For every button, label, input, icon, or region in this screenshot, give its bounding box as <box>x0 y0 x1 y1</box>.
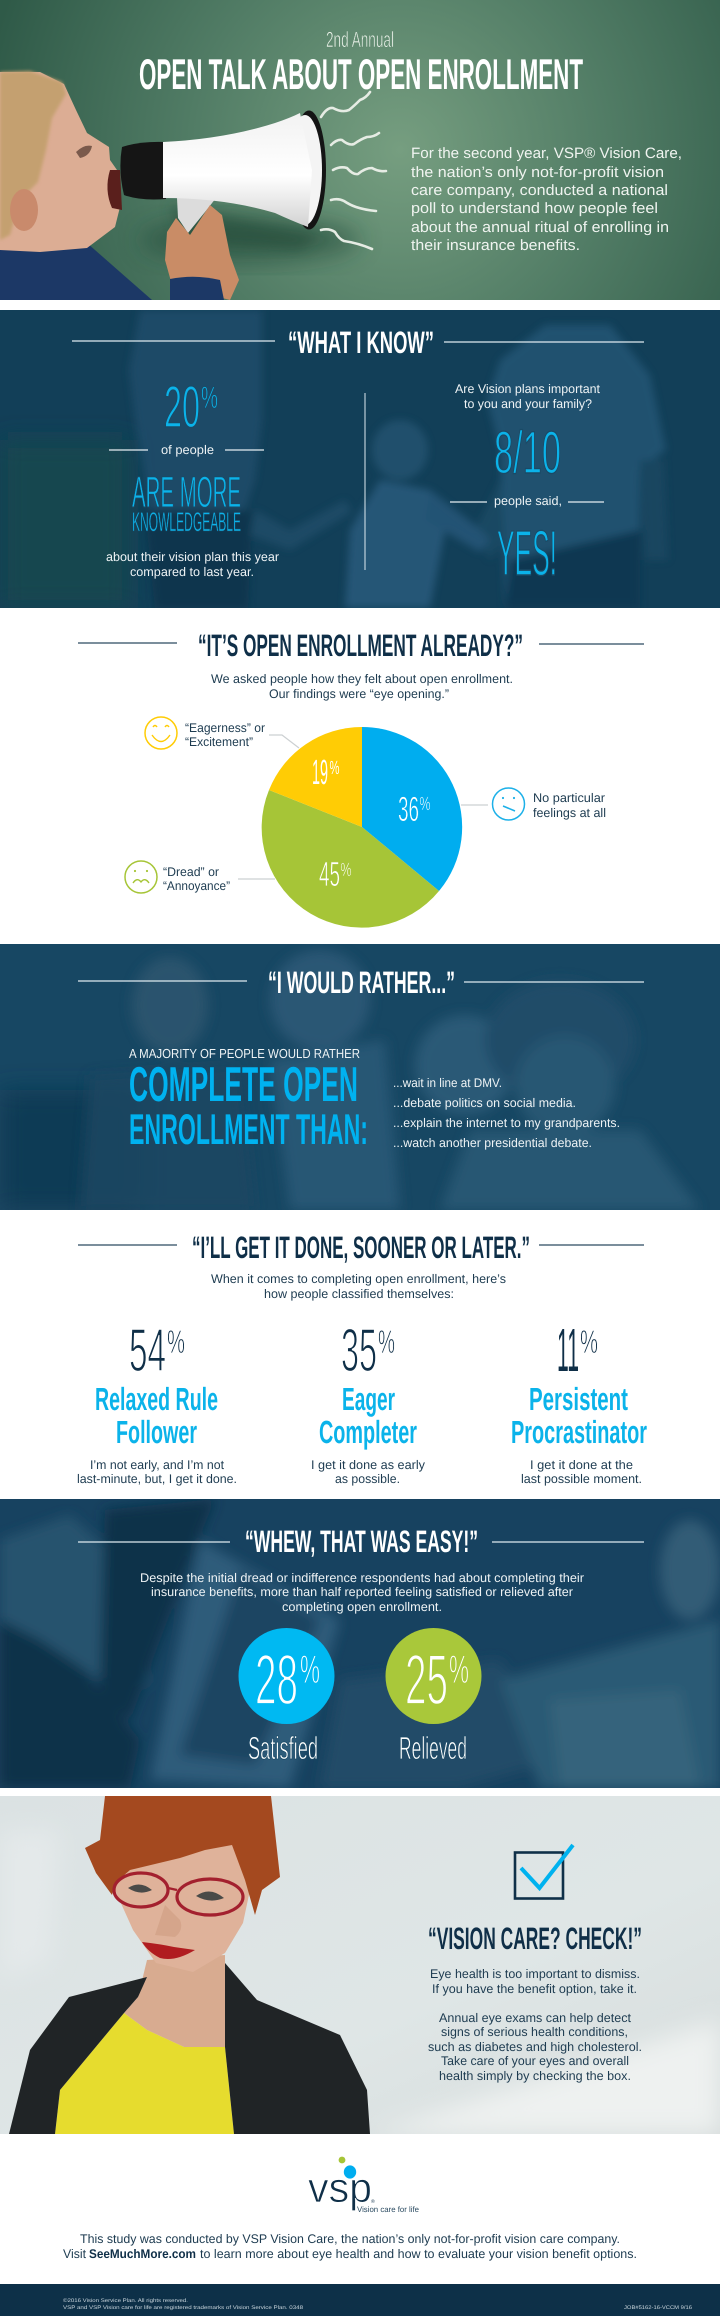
photo: woman with glasses <box>0 1796 720 2134</box>
stat: relaxed rule follower: 54 <box>129 1316 166 1384</box>
pie chart: 45 <box>319 855 340 894</box>
icon: blazer left <box>9 1977 147 2134</box>
panel: hero <box>0 0 720 300</box>
icon: megaphone shadow <box>170 205 320 250</box>
closing statement: Visit <box>63 2247 87 2261</box>
stat: 25% relieved <box>386 1628 482 1766</box>
stat: persistent procrastinator: % <box>580 1323 598 1360</box>
stat: 28% satisfied: Satisfied <box>248 1730 318 1766</box>
icon: boy's ear <box>10 189 38 231</box>
footer bar: JOB#5162-16-VCCM 9/16 <box>624 2305 692 2311</box>
headline <box>129 1046 368 1154</box>
stat: persistent procrastinator: last possible moment. <box>521 1472 642 1486</box>
heading: “I WOULD RATHER...” <box>268 965 455 1000</box>
stat: 8 of 10 said yes <box>450 382 604 589</box>
icon: boy's sweater <box>0 243 152 300</box>
background photo: bored people in line <box>0 944 720 1210</box>
stat: 20% more knowledgeable: about their vision plan this year <box>106 550 279 564</box>
icon: neck and chest <box>124 1955 225 2047</box>
body text: Eye health is too important to dismiss. <box>430 1967 640 1981</box>
stat: 20% more knowledgeable: ARE MORE <box>132 468 241 517</box>
pie chart: 36 <box>398 790 419 829</box>
body text: If you have the benefit option, take it. <box>432 1982 637 1996</box>
intro text: We asked people how they felt about open enrollment. <box>211 672 513 686</box>
body text: Annual eye exams can help detect <box>439 2011 632 2025</box>
stat: 28% satisfied: % <box>300 1648 320 1692</box>
stat: 20% more knowledgeable: % <box>201 380 218 415</box>
stat: 8 of 10 said yes: to you and your family? <box>464 397 592 411</box>
icon: nose shadow <box>155 1905 181 1937</box>
stat: persistent procrastinator: 11 <box>557 1316 579 1384</box>
stat: persistent procrastinator: Persistent <box>529 1381 628 1417</box>
stat: 20% more knowledgeable: of people <box>161 443 214 457</box>
hero intro text: their insurance benefits. <box>411 237 580 254</box>
headline: ENROLLMENT THAN: <box>129 1106 368 1154</box>
stat: 28% satisfied: 28 <box>255 1641 298 1720</box>
stat: eager completer: Completer <box>319 1414 417 1450</box>
stat: 8 of 10 said yes: people said, <box>494 494 562 508</box>
closing statement: to learn more about eye health and how to evaluate your vision benefit options. <box>200 2247 637 2261</box>
icon: face <box>115 1835 250 1972</box>
icon: checked box <box>515 1845 573 1898</box>
callout: dread or annoyance: “Dread” or <box>163 865 219 879</box>
icon: chalk sound waves <box>321 92 386 249</box>
intro text <box>211 1272 506 1301</box>
icon: boy's hair <box>0 71 66 240</box>
closing statement <box>63 2232 637 2261</box>
body text: health simply by checking the box. <box>439 2069 631 2083</box>
list of alternatives: ...watch another presidential debate. <box>393 1136 592 1150</box>
closing statement: This study was conducted by VSP Vision Care, the nation’s only not-for-profit vision care company. <box>80 2232 620 2246</box>
stat: persistent procrastinator: I get it done at the <box>530 1458 633 1472</box>
intro text: Despite the initial dread or indifference respondents had about completing their <box>140 1571 584 1585</box>
pie chart <box>262 727 462 928</box>
stat: 20% more knowledgeable: KNOWLEDGEABLE <box>132 507 241 537</box>
stat: 8 of 10 said yes: 8/10 <box>494 419 561 486</box>
icon: boy's hand <box>165 205 239 300</box>
hero intro text <box>411 145 682 254</box>
intro text: Our findings were “eye opening.” <box>269 687 449 701</box>
panel: I'll get it done <box>0 1210 720 1499</box>
stat: eager completer: as possible. <box>335 1472 400 1486</box>
body text: Take care of your eyes and overall <box>441 2054 629 2068</box>
list of alternatives: ...wait in line at DMV. <box>393 1076 502 1090</box>
stat: eager completer: Eager <box>342 1381 395 1417</box>
pie chart: % <box>420 794 431 815</box>
panel: vision care check <box>0 1796 720 2134</box>
hero intro text: For the second year, VSP® Vision Care, <box>411 145 682 162</box>
pie chart: 19 <box>312 753 328 792</box>
hero intro text: about the annual ritual of enrolling in <box>411 219 669 236</box>
callout: eagerness or excitement <box>145 717 299 749</box>
background photo: family holding hands <box>0 310 720 608</box>
panel: whew, that was easy <box>0 1499 720 1788</box>
list of alternatives: ...debate politics on social media. <box>393 1096 576 1110</box>
intro text: completing open enrollment. <box>282 1600 442 1614</box>
intro text <box>211 672 513 701</box>
stat: eager completer: I get it done as early <box>311 1458 426 1472</box>
callout: no particular feelings: feelings at all <box>533 806 606 820</box>
body text <box>428 1967 642 2083</box>
footer bar <box>0 2284 720 2316</box>
stat: eager completer: 35 <box>341 1316 377 1384</box>
callout: no particular feelings <box>461 788 606 820</box>
icon: yellow top <box>55 2013 234 2134</box>
icon: boy's head <box>0 72 120 252</box>
list of alternatives <box>393 1076 620 1150</box>
pie chart: % <box>330 758 340 779</box>
headline: A MAJORITY OF PEOPLE WOULD RATHER <box>129 1046 360 1061</box>
list of alternatives: ...explain the internet to my grandparents. <box>393 1116 620 1130</box>
body text: such as diabetes and high cholesterol. <box>428 2040 642 2054</box>
stat: relaxed rule follower <box>77 1316 237 1486</box>
icon: boy's mouth <box>107 170 122 210</box>
intro text <box>140 1571 584 1614</box>
body text: signs of serious health conditions, <box>441 2025 628 2039</box>
heading: “WHAT I KNOW” <box>288 325 434 360</box>
callout: no particular feelings: No particular <box>533 791 605 805</box>
callout: dread or annoyance: “Annoyance” <box>163 879 230 893</box>
stat: 25% relieved: % <box>449 1648 469 1692</box>
stat: relaxed rule follower: % <box>167 1323 185 1360</box>
logo: VSP <box>308 2157 420 2214</box>
icon: sleeve <box>170 277 224 300</box>
stat: relaxed rule follower: Follower <box>116 1414 197 1450</box>
hero photo: boy with megaphone on chalkboard <box>0 0 720 300</box>
pie chart: % <box>340 860 352 881</box>
footer bar: VSP and VSP Vision care for life are registered trademarks of Vision Service Plan. 0348 <box>63 2305 303 2311</box>
callout: dread or annoyance <box>125 861 275 893</box>
stat: eager completer: % <box>378 1323 395 1360</box>
hero intro text: poll to understand how people feel <box>411 200 658 217</box>
logo: VSP: ® <box>371 2199 375 2205</box>
closing statement: SeeMuchMore.com <box>89 2247 196 2261</box>
footer bar: ©2016 Vision Service Plan. All rights reserved. <box>63 2298 188 2304</box>
stat: 8 of 10 said yes: YES! <box>497 517 557 589</box>
icon: glasses <box>114 1873 243 1915</box>
intro text: insurance benefits, more than half reported feeling satisfied or relieved after <box>151 1585 573 1599</box>
background photo: people with laptop <box>0 1499 720 1788</box>
stat: relaxed rule follower: I’m not early, and I’m not <box>90 1458 225 1472</box>
logo: VSP: Vision care for life <box>357 2205 420 2214</box>
intro text: When it comes to completing open enrollment, here’s <box>211 1272 506 1286</box>
stat: eager completer <box>311 1316 426 1486</box>
hero intro text: the nation’s only not-for-profit vision <box>411 164 664 181</box>
hero intro text: care company, conducted a national <box>411 182 668 199</box>
icon: megaphone <box>120 110 326 233</box>
intro text: how people classified themselves: <box>264 1287 454 1301</box>
headline: COMPLETE OPEN <box>129 1058 358 1112</box>
icon: lips <box>142 1942 195 1959</box>
stat: 25% relieved: Relieved <box>399 1730 467 1766</box>
stat: 25% relieved: 25 <box>405 1641 448 1720</box>
stat: relaxed rule follower: last-minute, but, I get it done. <box>77 1472 237 1486</box>
logo: VSP: vsp <box>308 2164 372 2211</box>
stat: 28% satisfied <box>238 1628 334 1766</box>
panel: I would rather <box>0 944 720 1210</box>
stat: 20% more knowledgeable: 20 <box>164 374 200 440</box>
callout: eagerness or excitement: “Eagerness” or <box>185 721 265 735</box>
stat: persistent procrastinator <box>511 1316 647 1486</box>
panel: it's open enrollment already <box>0 608 720 944</box>
stat: 8 of 10 said yes: Are Vision plans important <box>455 382 601 396</box>
heading: “WHEW, THAT WAS EASY!” <box>245 1524 478 1559</box>
icon: hair <box>85 1796 280 1915</box>
stat: 20% more knowledgeable <box>106 374 279 579</box>
stat: 20% more knowledgeable: compared to last year. <box>130 565 254 579</box>
panel: what I know <box>0 310 720 608</box>
icon: blazer right <box>225 1963 370 2134</box>
icon: eyes <box>128 1884 224 1901</box>
stat: relaxed rule follower: Relaxed Rule <box>95 1381 218 1417</box>
icon: boy's eye <box>76 146 92 158</box>
hero kicker: 2nd Annual <box>326 27 394 52</box>
callout: eagerness or excitement: “Excitement” <box>185 735 253 749</box>
